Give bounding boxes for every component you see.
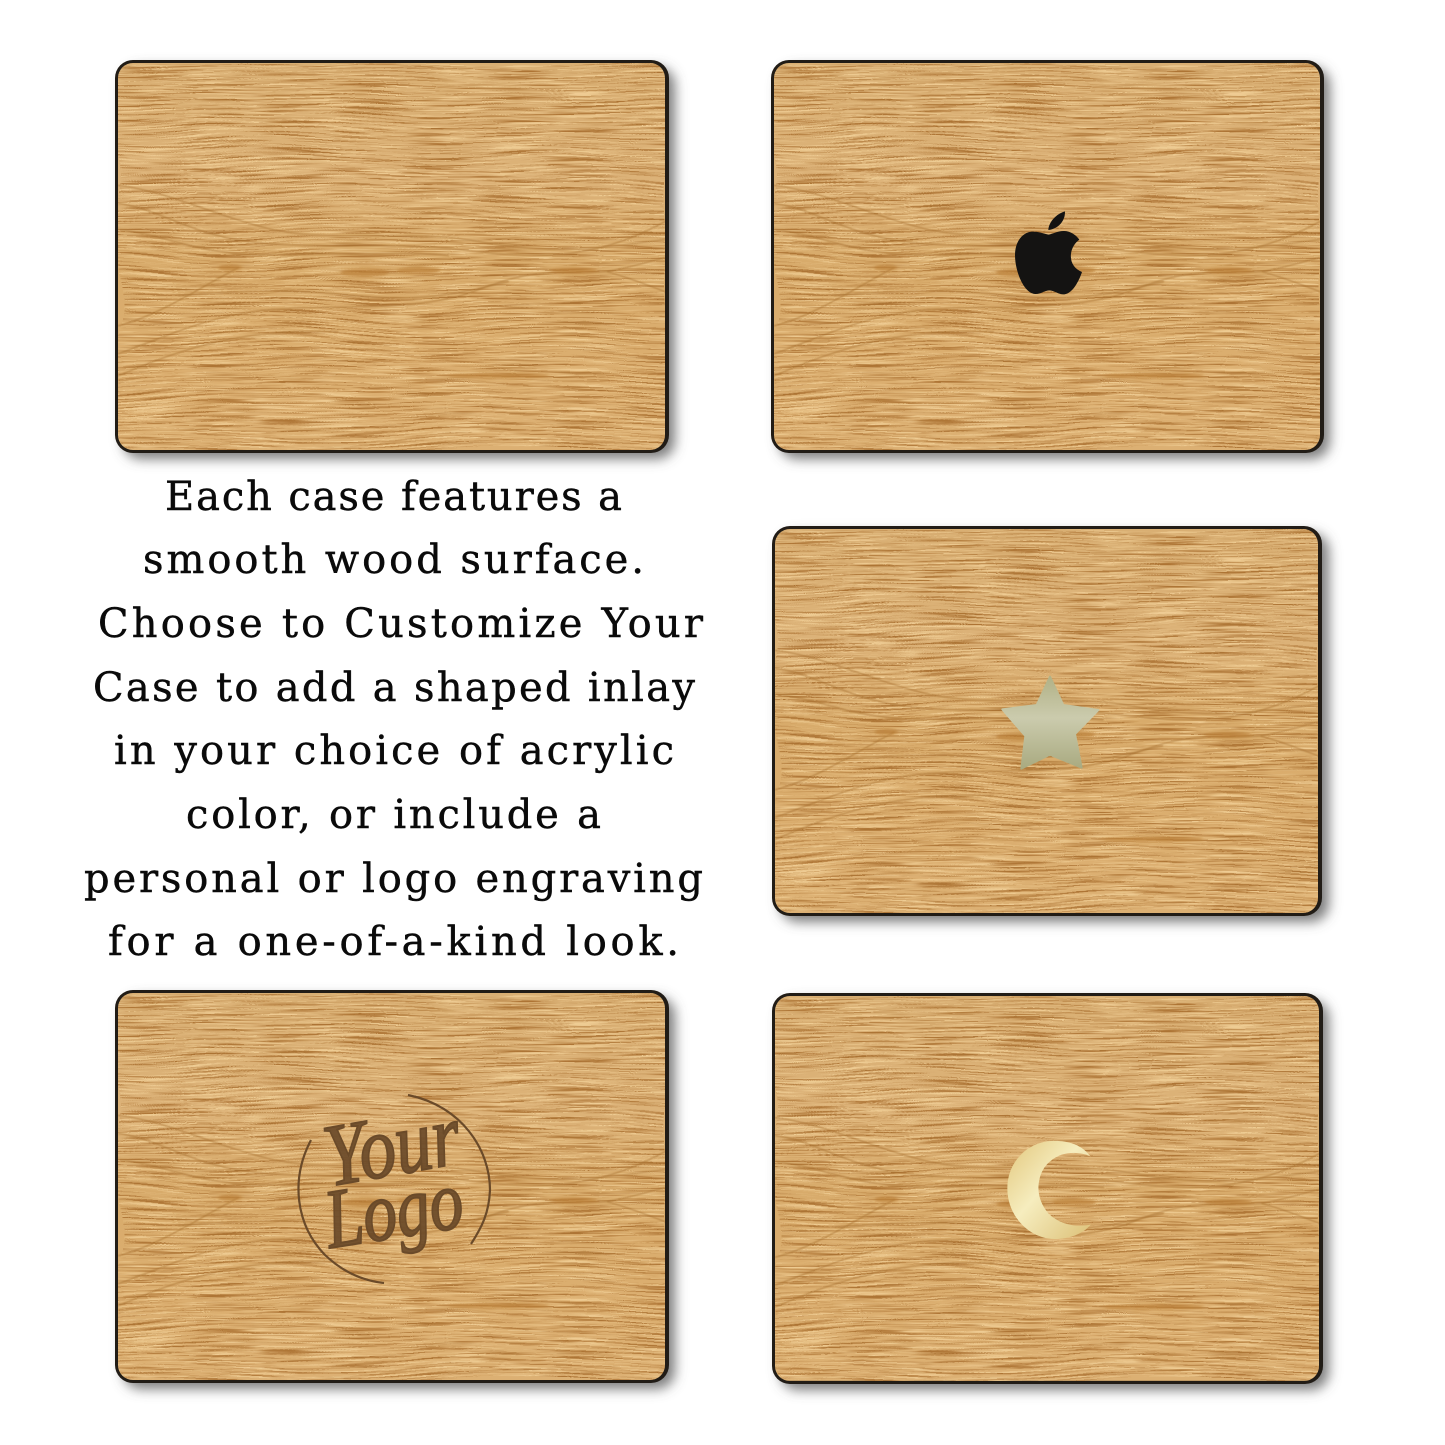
text block: description: Case to add a shaped inlay (93, 665, 695, 711)
panel: case with logo engraving (115, 990, 675, 1389)
panel: case with moon inlay (772, 993, 1329, 1390)
icon: engraved logo: Your (317, 1086, 468, 1206)
panel: plain wood case (115, 60, 675, 459)
text block: description: smooth wood surface. (143, 537, 644, 583)
text block: description: for a one-of-a-kind look. (108, 919, 679, 965)
panel: case with star inlay (772, 526, 1329, 922)
icon: star inlay (1002, 677, 1098, 769)
icon: engraved logo (299, 1086, 490, 1283)
panel: case with apple cutout (771, 60, 1330, 459)
text block: description: Choose to Customize Your (98, 601, 704, 647)
icon: engraved logo: Logo (318, 1153, 469, 1267)
text block: description: in your choice of acrylic (114, 728, 674, 774)
text block: description (84, 474, 704, 965)
text block: description: color, or include a (186, 792, 601, 838)
text block: description: personal or logo engraving (84, 856, 703, 902)
text block: description: Each case features a (165, 474, 622, 520)
icon: crescent moon inlay (1007, 1141, 1091, 1239)
icon: apple logo (1015, 211, 1082, 294)
